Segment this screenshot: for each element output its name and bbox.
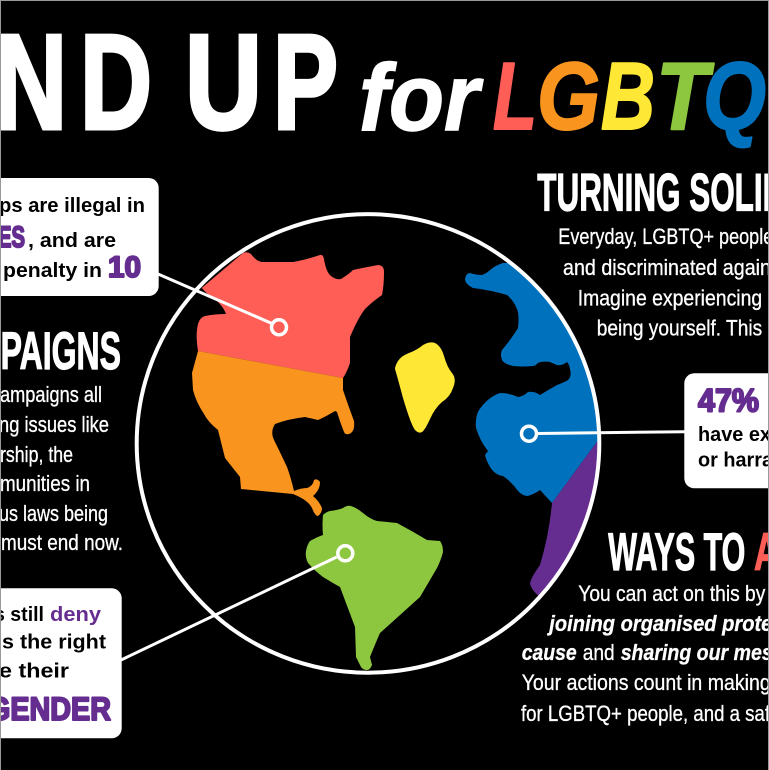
text block: campaigns <box>0 382 123 555</box>
text block: ways to act: and <box>583 640 615 665</box>
text block: ways to act: cause <box>522 640 577 665</box>
connector lines <box>121 274 685 660</box>
world map <box>192 252 598 670</box>
text block: campaigns: ng issues like <box>0 412 109 437</box>
continent: north america lower <box>192 351 354 516</box>
title: D <box>80 6 152 158</box>
text block: turning solidarity <box>558 224 769 341</box>
continent: north america upper <box>197 252 384 378</box>
title: P <box>273 6 338 158</box>
callout: illegal relationships: penalty in <box>3 259 102 282</box>
callout: deny gender: s the right <box>2 630 106 654</box>
callout: 47 percent <box>684 373 769 488</box>
map markers <box>272 320 536 561</box>
title: for <box>359 45 484 151</box>
title: U <box>185 6 262 158</box>
continent: yellow landmass <box>395 342 455 433</box>
callout: 47 percent: 47% <box>698 382 759 418</box>
title: B <box>601 43 655 150</box>
continent: purple landmass <box>530 441 598 597</box>
callout: illegal relationships: ps are illegal in <box>0 194 145 217</box>
title: T <box>656 43 715 150</box>
text block: ways to act <box>521 581 769 726</box>
text block: campaigns: must end now. <box>1 530 123 555</box>
callout: illegal relationships: 10 <box>108 251 141 284</box>
callout: illegal relationships: , and are <box>28 229 116 252</box>
title <box>0 6 766 158</box>
text block: campaigns: munities in <box>0 471 90 496</box>
continent: blue landmass <box>465 263 598 503</box>
text block: campaigns: us laws being <box>0 501 108 526</box>
text block: campaigns: rship, the <box>0 442 73 467</box>
callout: deny gender <box>0 588 122 738</box>
title: G <box>537 43 600 150</box>
callout: deny gender: e their <box>0 660 69 682</box>
callout: illegal relationships <box>0 178 159 296</box>
callout: deny gender: deny <box>50 603 102 626</box>
text block: campaigns: ampaigns all <box>0 382 102 407</box>
globe outline <box>137 214 599 673</box>
continent: south america <box>306 506 443 670</box>
title: L <box>493 43 537 150</box>
